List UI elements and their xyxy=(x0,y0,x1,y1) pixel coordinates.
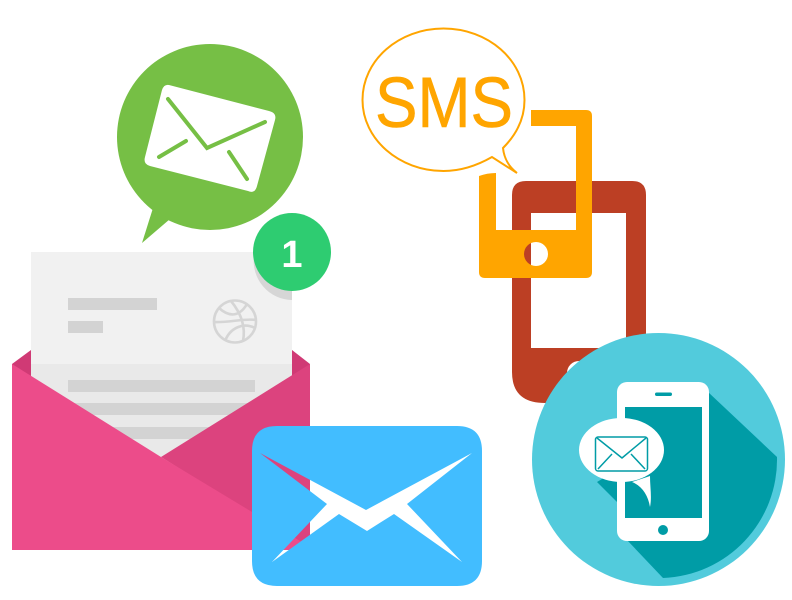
long shadow of phone xyxy=(627,392,777,578)
icon: orange phone outline xyxy=(479,110,592,278)
icon: green speech bubble with envelope xyxy=(117,44,303,243)
long shadow of bubble xyxy=(597,470,617,502)
envelope left and bottom fold xyxy=(12,364,310,550)
icon: red phone xyxy=(512,181,646,403)
icon: open pink envelope with letter xyxy=(12,252,310,550)
envelope right fold xyxy=(161,364,310,550)
message bubble xyxy=(579,418,664,507)
envelope back flap xyxy=(12,350,310,400)
smartphone xyxy=(617,382,709,541)
icon: teal circle with smartphone and message xyxy=(532,333,785,586)
letter xyxy=(31,252,292,460)
icon: dribbble ball xyxy=(214,300,256,342)
icon: notification badge xyxy=(253,213,331,300)
callout: SMS speech bubble xyxy=(362,28,524,173)
icon: blue envelope xyxy=(252,426,482,586)
icon: notification badge: 1 xyxy=(281,234,303,276)
callout: SMS speech bubble: SMS xyxy=(375,64,513,143)
